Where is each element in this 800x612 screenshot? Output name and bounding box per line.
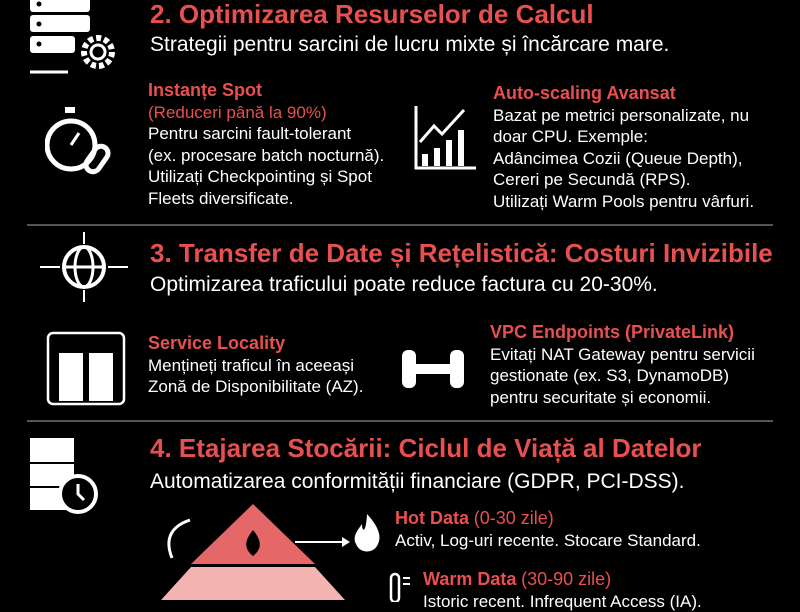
item: hot data bbox=[395, 508, 701, 550]
item: service locality: Zonă de Disponibilitate (AZ). bbox=[148, 377, 363, 396]
item: auto-scaling: Utilizați Warm Pools pentru vârfuri. bbox=[493, 192, 754, 210]
subtitle 2: Strategii pentru sarcini de lucru mixte și încărcare mare. bbox=[150, 33, 669, 56]
subtitle 3: Optimizarea traficului poate reduce factura cu 20-30%. bbox=[150, 273, 658, 296]
item: auto-scaling: Bazat pe metrici personalizate, nu bbox=[493, 106, 749, 124]
item: instante spot: Pentru sarcini fault-tolerant bbox=[148, 124, 351, 143]
item: vpc endpoints bbox=[490, 322, 755, 406]
icon: servers box bbox=[46, 332, 126, 406]
item: vpc endpoints: pentru securitate și economii. bbox=[490, 388, 711, 406]
item: service locality bbox=[148, 333, 363, 396]
icon: dumbbell endpoint bbox=[402, 350, 464, 388]
item: instante spot: Fleets diversificate. bbox=[148, 188, 294, 208]
item: auto-scaling bbox=[493, 83, 754, 210]
icon: growth chart bbox=[414, 106, 476, 170]
item: service locality: Mențineți traficul în aceeași bbox=[148, 356, 354, 374]
item: instante spot: Instanțe Spot bbox=[148, 80, 262, 100]
icon: server gear bbox=[30, 0, 115, 74]
icon: globe arrows bbox=[40, 232, 128, 302]
item: auto-scaling: Adâncimea Cozii (Queue Depth), bbox=[493, 148, 742, 168]
subtitle 4: Automatizarea conformității financiare (GDPR, PCI-DSS). bbox=[150, 470, 685, 493]
item: service locality: Service Locality bbox=[148, 333, 285, 353]
item: warm data: Warm Data (30-90 zile) bbox=[423, 569, 611, 589]
item: auto-scaling: Auto-scaling Avansat bbox=[493, 83, 676, 103]
item: instante spot: Utilizați Checkpointing și Spot bbox=[148, 167, 372, 186]
item: vpc endpoints: gestionate (ex. S3, DynamoDB) bbox=[490, 366, 729, 385]
item: hot data: Activ, Log-uri recente. Stocare Standard. bbox=[395, 530, 701, 550]
item: warm data bbox=[423, 569, 702, 610]
item: instante spot bbox=[148, 80, 384, 208]
item: warm data: Istoric recent. Infrequent Access (IA). bbox=[423, 592, 702, 610]
pyramid chart bbox=[161, 504, 350, 600]
item: instante spot: (ex. procesare batch nocturnă). bbox=[148, 146, 384, 164]
item: auto-scaling: Cereri pe Secundă (RPS). bbox=[493, 170, 690, 189]
item: vpc endpoints: Evitați NAT Gateway pentru servicii bbox=[490, 344, 755, 364]
icon: flame bbox=[354, 514, 380, 552]
title 3: 3. Transfer de Date și Rețelistică: Costuri Invizibile bbox=[150, 238, 773, 268]
icon: storage clock bbox=[30, 438, 98, 514]
title 4: 4. Etajarea Stocării: Ciclul de Viață al Datelor bbox=[150, 433, 702, 463]
icon: stopwatch broken link bbox=[45, 107, 110, 174]
item: hot data: Hot Data (0-30 zile) bbox=[395, 508, 554, 528]
item: instante spot: (Reduceri până la 90%) bbox=[148, 102, 327, 122]
item: vpc endpoints: VPC Endpoints (PrivateLink) bbox=[490, 322, 734, 342]
item: auto-scaling: doar CPU. Exemple: bbox=[493, 127, 648, 146]
icon: thermometer bbox=[390, 572, 410, 602]
